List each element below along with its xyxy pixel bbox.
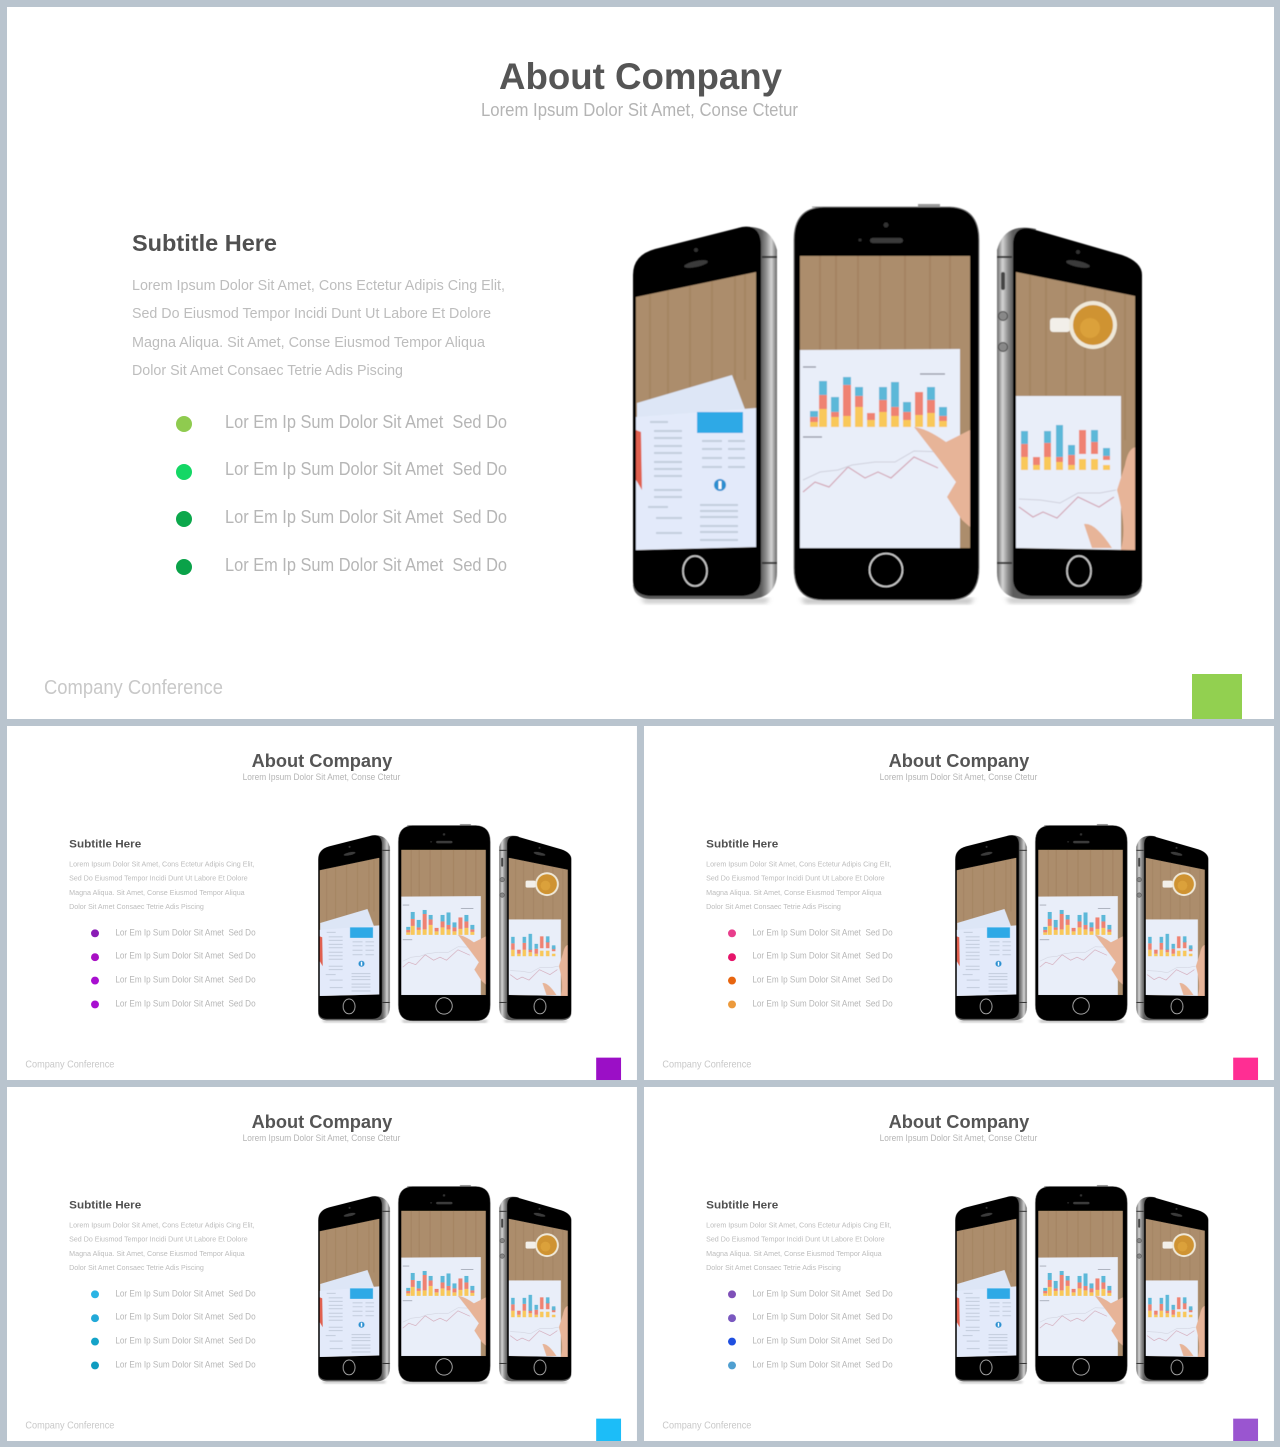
footer label: Company Conference xyxy=(25,1421,115,1432)
title: About Company xyxy=(252,750,393,771)
bullet list: Lor Em Ip Sum Dolor Sit Amet Sed Do xyxy=(115,998,256,1008)
bullet list: Lor Em Ip Sum Dolor Sit Amet Sed Do xyxy=(752,1359,893,1369)
image: three phones xyxy=(317,1185,571,1384)
bullet list: Lor Em Ip Sum Dolor Sit Amet Sed Do xyxy=(115,1288,256,1298)
paragraph: Sed Do Eiusmod Tempor Incidi Dunt Ut Labore Et Dolore xyxy=(706,874,885,883)
paragraph: Magna Aliqua. Sit Amet, Conse Eiusmod Tempor Aliqua xyxy=(69,1249,245,1258)
subtitle: Lorem Ipsum Dolor Sit Amet, Conse Ctetur xyxy=(880,772,1037,782)
paragraph xyxy=(69,1221,255,1272)
bullet list: Lor Em Ip Sum Dolor Sit Amet Sed Do xyxy=(115,1312,256,1322)
footer label: Company Conference xyxy=(662,1060,752,1071)
image: three phones xyxy=(630,204,1142,604)
paragraph: Sed Do Eiusmod Tempor Incidi Dunt Ut Labore Et Dolore xyxy=(706,1235,885,1244)
bullet list: Lor Em Ip Sum Dolor Sit Amet Sed Do xyxy=(225,459,507,479)
subtitle: Lorem Ipsum Dolor Sit Amet, Conse Ctetur xyxy=(243,772,400,782)
paragraph: Dolor Sit Amet Consaec Tetrie Adis Piscing xyxy=(69,902,204,911)
footer label: Company Conference xyxy=(662,1421,752,1432)
bullet list: Lor Em Ip Sum Dolor Sit Amet Sed Do xyxy=(752,975,893,985)
section heading: Subtitle Here xyxy=(132,230,277,256)
paragraph: Lorem Ipsum Dolor Sit Amet, Cons Ectetur Adipis Cing Elit, xyxy=(69,860,255,869)
paragraph: Magna Aliqua. Sit Amet, Conse Eiusmod Tempor Aliqua xyxy=(706,1249,882,1258)
section heading: Subtitle Here xyxy=(69,1199,141,1211)
bullet list xyxy=(728,927,893,1008)
section heading: Subtitle Here xyxy=(706,1199,778,1211)
bullet list: Lor Em Ip Sum Dolor Sit Amet Sed Do xyxy=(225,507,507,527)
image: three phones xyxy=(317,824,571,1023)
accent square xyxy=(1233,1419,1258,1441)
bullet list: Lor Em Ip Sum Dolor Sit Amet Sed Do xyxy=(752,1336,893,1346)
paragraph: Magna Aliqua. Sit Amet, Conse Eiusmod Tempor Aliqua xyxy=(132,334,486,351)
title: About Company xyxy=(499,56,782,97)
footer label: Company Conference xyxy=(44,677,223,699)
bullet list: Lor Em Ip Sum Dolor Sit Amet Sed Do xyxy=(115,1359,256,1369)
paragraph xyxy=(706,860,892,911)
panel: violet slide xyxy=(644,1087,1274,1441)
paragraph: Magna Aliqua. Sit Amet, Conse Eiusmod Tempor Aliqua xyxy=(69,888,245,897)
paragraph: Sed Do Eiusmod Tempor Incidi Dunt Ut Labore Et Dolore xyxy=(69,1235,248,1244)
paragraph xyxy=(706,1221,892,1272)
paragraph xyxy=(69,860,255,911)
bullet list xyxy=(176,412,507,575)
accent square xyxy=(1233,1058,1258,1080)
panel: pink slide xyxy=(644,726,1274,1080)
paragraph: Magna Aliqua. Sit Amet, Conse Eiusmod Tempor Aliqua xyxy=(706,888,882,897)
bullet list xyxy=(91,1288,256,1369)
subtitle: Lorem Ipsum Dolor Sit Amet, Conse Ctetur xyxy=(880,1133,1037,1143)
accent square xyxy=(596,1058,621,1080)
image: three phones xyxy=(954,1185,1208,1384)
bullet list: Lor Em Ip Sum Dolor Sit Amet Sed Do xyxy=(225,412,507,432)
paragraph: Dolor Sit Amet Consaec Tetrie Adis Piscing xyxy=(706,1263,841,1272)
accent square xyxy=(1192,674,1242,719)
paragraph: Dolor Sit Amet Consaec Tetrie Adis Piscing xyxy=(706,902,841,911)
bullet list: Lor Em Ip Sum Dolor Sit Amet Sed Do xyxy=(752,998,893,1008)
paragraph: Sed Do Eiusmod Tempor Incidi Dunt Ut Labore Et Dolore xyxy=(69,874,248,883)
bullet list: Lor Em Ip Sum Dolor Sit Amet Sed Do xyxy=(115,951,256,961)
bullet list xyxy=(91,927,256,1008)
title: About Company xyxy=(252,1111,393,1132)
paragraph: Lorem Ipsum Dolor Sit Amet, Cons Ectetur Adipis Cing Elit, xyxy=(132,277,505,294)
bullet list: Lor Em Ip Sum Dolor Sit Amet Sed Do xyxy=(752,1288,893,1298)
bullet list: Lor Em Ip Sum Dolor Sit Amet Sed Do xyxy=(115,1336,256,1346)
title: About Company xyxy=(889,1111,1030,1132)
title: About Company xyxy=(889,750,1030,771)
footer label: Company Conference xyxy=(25,1060,115,1071)
panel: blue slide xyxy=(7,1087,637,1441)
bullet list: Lor Em Ip Sum Dolor Sit Amet Sed Do xyxy=(752,1312,893,1322)
paragraph: Lorem Ipsum Dolor Sit Amet, Cons Ectetur Adipis Cing Elit, xyxy=(706,1221,892,1230)
accent square xyxy=(596,1419,621,1441)
bullet list: Lor Em Ip Sum Dolor Sit Amet Sed Do xyxy=(115,975,256,985)
bullet list: Lor Em Ip Sum Dolor Sit Amet Sed Do xyxy=(752,951,893,961)
paragraph: Dolor Sit Amet Consaec Tetrie Adis Piscing xyxy=(132,362,403,379)
bullet list: Lor Em Ip Sum Dolor Sit Amet Sed Do xyxy=(225,555,507,575)
section heading: Subtitle Here xyxy=(69,838,141,850)
panel: purple slide xyxy=(7,726,637,1080)
paragraph: Lorem Ipsum Dolor Sit Amet, Cons Ectetur Adipis Cing Elit, xyxy=(69,1221,255,1230)
bullet list: Lor Em Ip Sum Dolor Sit Amet Sed Do xyxy=(752,927,893,937)
image: three phones xyxy=(954,824,1208,1023)
subtitle: Lorem Ipsum Dolor Sit Amet, Conse Ctetur xyxy=(243,1133,400,1143)
paragraph: Dolor Sit Amet Consaec Tetrie Adis Piscing xyxy=(69,1263,204,1272)
paragraph xyxy=(132,277,505,379)
paragraph: Lorem Ipsum Dolor Sit Amet, Cons Ectetur Adipis Cing Elit, xyxy=(706,860,892,869)
bullet list: Lor Em Ip Sum Dolor Sit Amet Sed Do xyxy=(115,927,256,937)
panel: main slide xyxy=(7,7,1274,719)
bullet list xyxy=(728,1288,893,1369)
subtitle: Lorem Ipsum Dolor Sit Amet, Conse Ctetur xyxy=(481,100,798,120)
paragraph: Sed Do Eiusmod Tempor Incidi Dunt Ut Labore Et Dolore xyxy=(132,305,491,322)
section heading: Subtitle Here xyxy=(706,838,778,850)
